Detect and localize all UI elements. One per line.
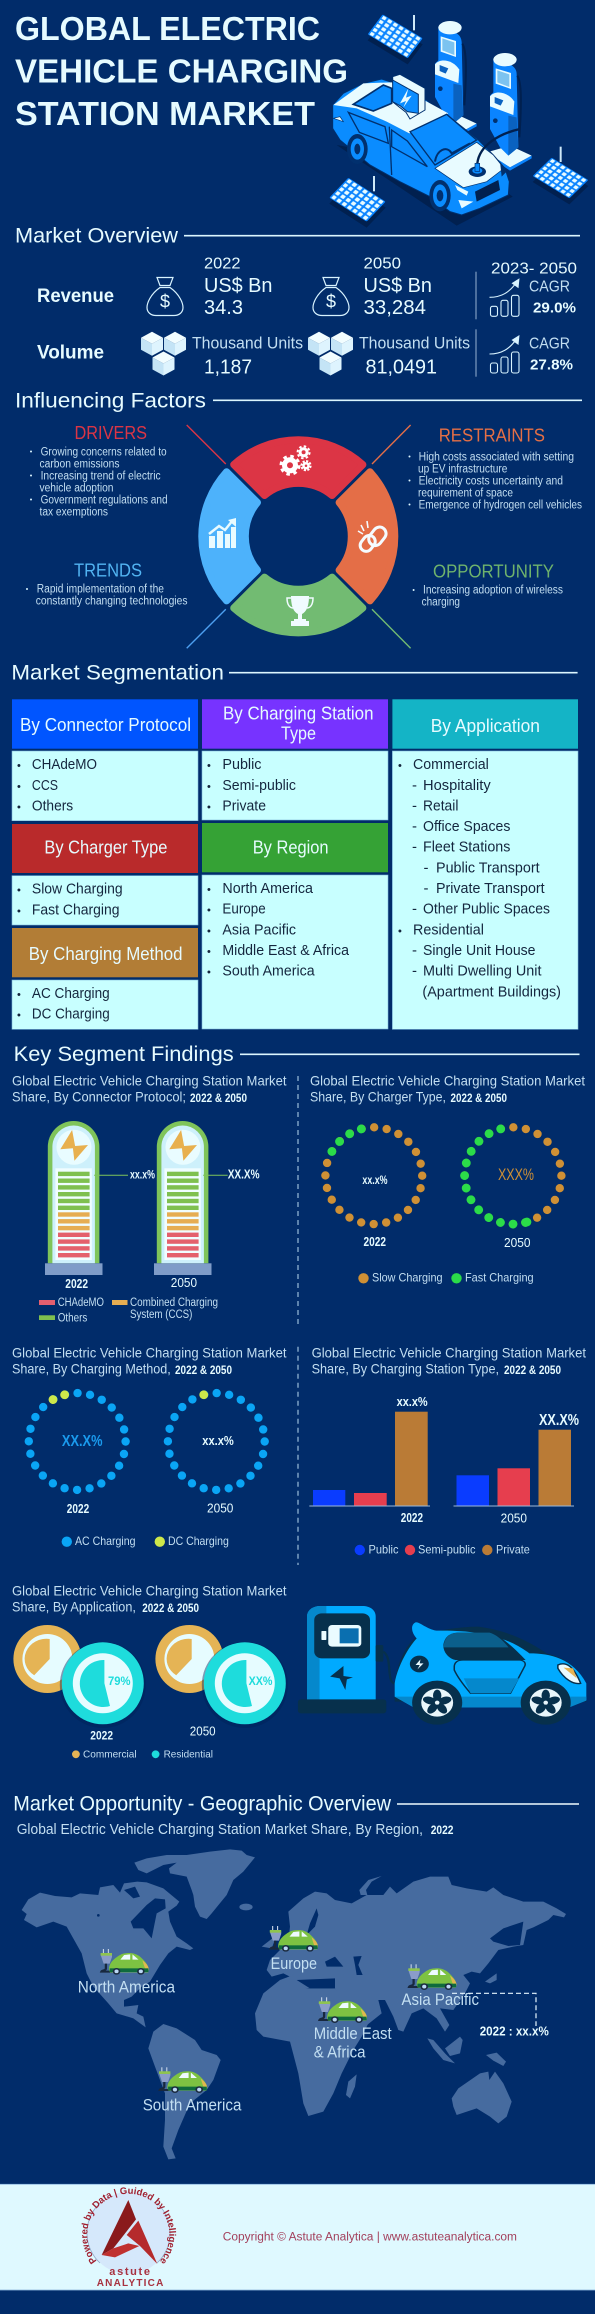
callout: Asia Pacific share: 2022 : xx.x%	[480, 2024, 549, 2039]
value 2022: XX.X%	[62, 1433, 102, 1450]
panel: by charging method: •	[17, 1010, 21, 1022]
title: GLOBAL ELECTRIC	[15, 10, 320, 47]
map subtitle: Global Electric Vehicle Charging Station Market Share, By Region,	[17, 1822, 423, 1838]
chart title: 2022 & 2050	[504, 1363, 561, 1377]
volume 2050	[359, 333, 470, 379]
dot ring 2050	[454, 1116, 572, 1235]
panel: by charging station type: •	[207, 801, 211, 813]
panel: by region: By Region	[253, 837, 329, 857]
cable	[383, 1652, 419, 1685]
legend: Combined Charging	[130, 1297, 218, 1309]
legend: Commercial	[83, 1749, 137, 1761]
panel: by application: Multi Dwelling Unit	[423, 963, 542, 980]
CAGR revenue: 29.0%	[533, 300, 576, 317]
panel: restraints: RESTRAINTS	[439, 426, 545, 446]
value callouts	[94, 1166, 260, 1182]
icon: trophy	[287, 596, 313, 626]
title	[15, 10, 348, 132]
chart title: 2022 & 2050	[190, 1091, 247, 1105]
marker: Middle East and Africa	[314, 1997, 392, 2062]
value 2050: xx.x%	[202, 1433, 234, 1448]
heading: market overview: Market Overview	[15, 225, 179, 248]
marker: Europe: Europe	[271, 1954, 317, 1973]
revenue 2022	[204, 255, 272, 319]
value labels: xx.x%	[397, 1394, 428, 1409]
logo: Powered by Data | Guided by Intelligence	[82, 2187, 176, 2264]
revenue 2050: 33,284	[364, 297, 426, 319]
revenue 2022: 2022	[204, 255, 241, 272]
chart title: Share, By Application,	[12, 1598, 136, 1614]
panel: by charging station type: By Charging Station	[223, 703, 374, 723]
CAGR revenue	[529, 279, 576, 317]
chart: charger type	[308, 1072, 585, 1285]
chart title: Share, By Charging Method,	[12, 1360, 171, 1376]
chart: connector protocol	[12, 1072, 287, 1325]
panel: by charging station type: Semi-public	[222, 777, 296, 794]
charging post 1	[432, 21, 477, 139]
icon: growth chart	[209, 518, 236, 548]
chart title	[12, 1582, 287, 1615]
legend: AC Charging	[75, 1534, 136, 1548]
panel: by region: Europe	[222, 901, 266, 918]
panel: by charger type: •	[17, 885, 21, 897]
volume 2050: Thousand Units	[359, 333, 470, 352]
marker: Middle East and Africa: & Africa	[314, 2043, 366, 2062]
legend	[62, 1534, 229, 1548]
ring segment: trends	[202, 472, 258, 601]
revenue 2022: US$ Bn	[204, 275, 272, 297]
revenue 2022: 34.3	[204, 297, 243, 319]
panel: restraints	[408, 426, 582, 511]
marker: Asia Pacific	[402, 1964, 479, 2009]
dot ring 2022	[308, 1110, 440, 1242]
panel: by connector protocol: •	[17, 781, 21, 793]
chart: charging method	[11, 1344, 287, 1548]
panel: by connector protocol: Others	[32, 797, 73, 814]
revenue label: Revenue	[37, 286, 114, 307]
chart title	[310, 1072, 585, 1105]
icon: broken link	[358, 521, 389, 554]
panel: by application: (Apartment Buildings)	[422, 983, 561, 1000]
panel: by application: -	[412, 797, 417, 814]
pie pair 2022: 79%	[108, 1674, 131, 1688]
heading: market segmentation: Market Segmentation	[11, 661, 224, 684]
panel: trends: constantly changing technologies	[36, 596, 188, 608]
panel: by charging station type: •	[207, 760, 211, 772]
year labels: 2022	[67, 1501, 89, 1516]
connector lines	[187, 425, 411, 648]
roof charging badge	[393, 74, 425, 119]
value callouts: xx.x%	[130, 1168, 155, 1182]
year labels: 2022	[401, 1510, 423, 1525]
chart title: 2022 & 2050	[450, 1091, 507, 1105]
panel: by charger type: By Charger Type	[44, 837, 167, 857]
callout: Asia Pacific share	[452, 1993, 549, 2039]
marker: North America	[78, 1949, 175, 1997]
value 2050: XXX%	[498, 1165, 534, 1184]
panel: by application: -	[412, 818, 417, 835]
year labels: 2050	[171, 1275, 197, 1290]
panel: by charger type: Slow Charging	[32, 881, 123, 898]
legend: Semi-public	[418, 1542, 476, 1556]
panel: by connector protocol: •	[17, 801, 21, 813]
legend	[72, 1749, 213, 1761]
icon: money bag 2050	[313, 278, 349, 316]
marker: South America: South America	[143, 2096, 242, 2115]
volume 2022: 1,187	[204, 357, 252, 379]
chart title	[312, 1344, 586, 1377]
legend: System (CCS)	[130, 1309, 193, 1321]
heading: key segment findings: Key Segment Findings	[14, 1043, 234, 1066]
legend	[358, 1271, 534, 1285]
icon: cubes 2050	[308, 332, 353, 376]
year labels: 2050	[190, 1724, 216, 1739]
CAGR volume	[529, 335, 573, 373]
chart title: Global Electric Vehicle Charging Station Market	[12, 1582, 287, 1598]
panel: by application: -	[412, 839, 417, 856]
car shadow	[337, 145, 513, 226]
panel: by application: Fleet Stations	[423, 839, 510, 856]
panel: by region: •	[207, 946, 211, 958]
legend: CHAdeMO	[58, 1297, 104, 1309]
charging post 2	[487, 53, 532, 171]
panel: by application: By Application	[431, 716, 540, 736]
panel: by charging station type: •	[207, 781, 211, 793]
revenue 2050	[364, 255, 432, 319]
panel: by charging station type: Public	[222, 756, 262, 773]
legend: Others	[58, 1313, 88, 1325]
panel: by application: Commercial	[413, 756, 489, 773]
panel: opportunity: Increasing adoption of wireless	[423, 585, 563, 597]
heading: market opportunity: Market Opportunity - Geographic Overview	[13, 1793, 392, 1816]
chart title	[12, 1344, 287, 1377]
copyright: Copyright © Astute Analytica | www.astuteanalytica.com	[223, 2232, 517, 2244]
year labels	[401, 1510, 527, 1526]
value callouts: XX.X%	[228, 1166, 260, 1181]
panel: by charging method: DC Charging	[32, 1006, 110, 1023]
panel: by charger type: •	[17, 905, 21, 917]
icon: money bag 2022: $	[160, 292, 170, 312]
panel: by charging method: By Charging Method	[29, 944, 182, 964]
bars 2022	[309, 1412, 430, 1506]
panel: by application: Hospitality	[423, 777, 491, 794]
year labels: 2050	[501, 1511, 527, 1526]
panel: by application: -	[412, 901, 417, 918]
ring segment: restraints	[339, 472, 395, 601]
year labels: 2050	[504, 1235, 530, 1250]
ring segment: drivers	[234, 440, 363, 496]
value labels: XX.X%	[539, 1412, 579, 1429]
year labels	[67, 1500, 233, 1516]
CAGR volume: 27.8%	[530, 356, 573, 373]
value 2022: xx.x%	[362, 1173, 388, 1187]
blue car	[395, 1622, 586, 1707]
CAGR revenue: CAGR	[529, 279, 570, 296]
panel: by charging method: •	[17, 989, 21, 1001]
panel: by application: Other Public Spaces	[423, 901, 550, 918]
panel: by application: -	[424, 859, 428, 876]
panel: by application: Residential	[413, 921, 484, 938]
chart title: Global Electric Vehicle Charging Station Market	[12, 1072, 287, 1088]
panel: by charging method	[12, 928, 198, 1029]
title: VEHICLE CHARGING	[15, 52, 348, 89]
panel: by region	[202, 823, 388, 1029]
logo: ANALYTICA	[97, 2278, 163, 2289]
world map	[22, 1849, 566, 2159]
legend: Private	[496, 1542, 530, 1556]
volume 2050: 81,0491	[366, 357, 437, 379]
panel: by charger type: Fast Charging	[32, 901, 119, 918]
panel: opportunity: charging	[422, 597, 460, 609]
bars 2050	[454, 1430, 574, 1506]
panel: by charging method: AC Charging	[32, 985, 110, 1002]
icon: growth chart revenue	[490, 278, 520, 316]
charge cable	[477, 129, 520, 163]
panel: drivers	[30, 423, 168, 518]
chart title: Share, By Charger Type,	[310, 1088, 446, 1104]
panel: restraints: requirement of space	[418, 487, 513, 499]
revenue 2050: US$ Bn	[364, 275, 432, 297]
pie pair 2022	[13, 1625, 146, 1728]
chart title: Share, By Connector Protocol;	[12, 1088, 186, 1104]
panel: by charging station type	[202, 699, 388, 820]
legend: DC Charging	[168, 1534, 229, 1548]
chart title	[12, 1072, 287, 1105]
panel: by application: Public Transport	[436, 859, 540, 876]
panel: by region: Middle East & Africa	[222, 942, 350, 959]
legend	[39, 1297, 218, 1325]
panel: by region: •	[207, 884, 211, 896]
year labels: 2022	[65, 1276, 88, 1291]
marker: Europe	[270, 1926, 318, 1973]
panel: restraints: up EV infrastructure	[418, 463, 507, 475]
solar panel bottom	[329, 176, 386, 228]
pie pair 2050: XX%	[249, 1674, 273, 1688]
panel: by application: Private Transport	[436, 880, 545, 897]
pie pair 2050	[155, 1625, 288, 1728]
panel: drivers: vehicle adoption	[40, 482, 114, 494]
panel: by connector protocol: By Connector Protocol	[20, 715, 191, 735]
icon: growth chart volume	[490, 335, 520, 373]
panel: by application: •	[398, 925, 402, 937]
solar panel top	[368, 14, 423, 64]
battery 2022	[45, 1121, 102, 1275]
year labels	[90, 1724, 216, 1743]
marker: South America	[143, 2067, 242, 2115]
battery 2050	[154, 1121, 212, 1275]
chart: charging station type	[309, 1344, 586, 1556]
panel: trends: Rapid implementation of the	[37, 584, 164, 596]
icon: gears	[281, 446, 311, 474]
panel: by application: Single Unit House	[423, 942, 536, 959]
panel: drivers: tax exemptions	[40, 506, 108, 518]
wheels	[412, 1681, 571, 1725]
solar panel right	[533, 147, 588, 204]
year labels	[65, 1275, 197, 1291]
panel: by application: Office Spaces	[423, 818, 510, 835]
chart: application	[12, 1582, 288, 1761]
panel: trends	[26, 560, 188, 608]
dot ring 2022	[11, 1375, 143, 1508]
CAGR volume: CAGR	[529, 335, 570, 352]
panel: drivers: Increasing trend of electric	[41, 470, 161, 482]
panel: by region: Asia Pacific	[222, 921, 296, 938]
chart title: Share, By Charging Station Type,	[312, 1360, 499, 1376]
panel: trends: TRENDS	[74, 560, 142, 580]
year labels: 2050	[207, 1500, 233, 1515]
panel: by charging station type: Private	[222, 797, 266, 814]
panel: by connector protocol: CCS	[32, 777, 58, 794]
icon: cubes 2022	[141, 332, 186, 376]
car body	[333, 79, 509, 215]
map subtitle: 2022	[431, 1823, 454, 1837]
panel: by application: •	[398, 760, 402, 772]
panel: by connector protocol: CHAdeMO	[32, 756, 97, 773]
panel: by application: -	[412, 942, 417, 959]
volume 2022: Thousand Units	[192, 333, 303, 352]
legend	[355, 1542, 530, 1556]
logo: astute	[109, 2266, 150, 2278]
CAGR period: 2023- 2050	[491, 260, 577, 277]
panel: by region: South America	[222, 963, 315, 980]
panel: drivers: DRIVERS	[74, 423, 147, 443]
legend: Fast Charging	[465, 1271, 534, 1285]
panel: drivers: Government regulations and	[41, 494, 168, 506]
panel: by application: -	[412, 777, 417, 794]
marker: Middle East and Africa: Middle East	[314, 2024, 392, 2043]
revenue 2050: 2050	[364, 255, 401, 272]
panel: restraints: Electricity costs uncertainty and	[419, 475, 563, 487]
panel: by charger type	[12, 824, 198, 925]
map: Americas and Greenland	[22, 1849, 255, 2159]
panel: by charging station type: Type	[281, 723, 316, 743]
marker: North America: North America	[78, 1978, 175, 1997]
illustration: EV charger and blue car	[298, 1606, 586, 1725]
panel: by region: North America	[222, 880, 314, 897]
panel: drivers: carbon emissions	[40, 458, 120, 470]
marker: Asia Pacific: Asia Pacific	[402, 1990, 479, 2009]
map markers and labels	[78, 1926, 549, 2115]
map: Eurasia, Africa and Oceania	[255, 1876, 566, 2123]
legend: Public	[368, 1542, 398, 1556]
value labels	[397, 1394, 579, 1429]
panel: opportunity: OPPORTUNITY	[433, 561, 554, 581]
panel: by application: -	[412, 963, 417, 980]
panel: by application: Retail	[423, 797, 458, 814]
charger	[298, 1606, 386, 1713]
panel: by application: -	[424, 880, 428, 897]
panel: by application	[392, 699, 578, 1029]
icon: money bag 2022	[147, 278, 183, 316]
panel: drivers: Growing concerns related to	[41, 446, 167, 458]
illustration: EV at charging stations with solar panels	[329, 14, 588, 228]
heading: influencing factors: Influencing Factors	[15, 389, 206, 412]
year labels: 2022	[90, 1729, 113, 1743]
year labels	[364, 1234, 530, 1250]
panel: by region: •	[207, 967, 211, 979]
panel: opportunity	[413, 561, 563, 609]
panel: restraints: High costs associated with setting	[419, 451, 574, 463]
factors ring diagram	[187, 425, 411, 648]
panel: by connector protocol	[12, 699, 198, 821]
legend: Residential	[164, 1749, 213, 1761]
panel: market overview figures	[37, 255, 577, 379]
dot ring 2050	[157, 1382, 276, 1501]
panel: by connector protocol: •	[17, 760, 21, 772]
year labels: 2022	[364, 1234, 386, 1249]
panel: by region: •	[207, 925, 211, 937]
chart title: Global Electric Vehicle Charging Station Market	[12, 1344, 287, 1360]
chart title: 2022 & 2050	[175, 1363, 232, 1377]
ring segment: opportunity	[234, 577, 363, 633]
icon: money bag 2050: $	[326, 292, 336, 312]
panel: by region: •	[207, 905, 211, 917]
volume label: Volume	[37, 343, 104, 364]
chart title: 2022 & 2050	[142, 1601, 199, 1615]
footer	[0, 2184, 595, 2290]
legend: Slow Charging	[372, 1271, 442, 1285]
volume 2022	[192, 333, 303, 379]
title: STATION MARKET	[15, 95, 315, 132]
